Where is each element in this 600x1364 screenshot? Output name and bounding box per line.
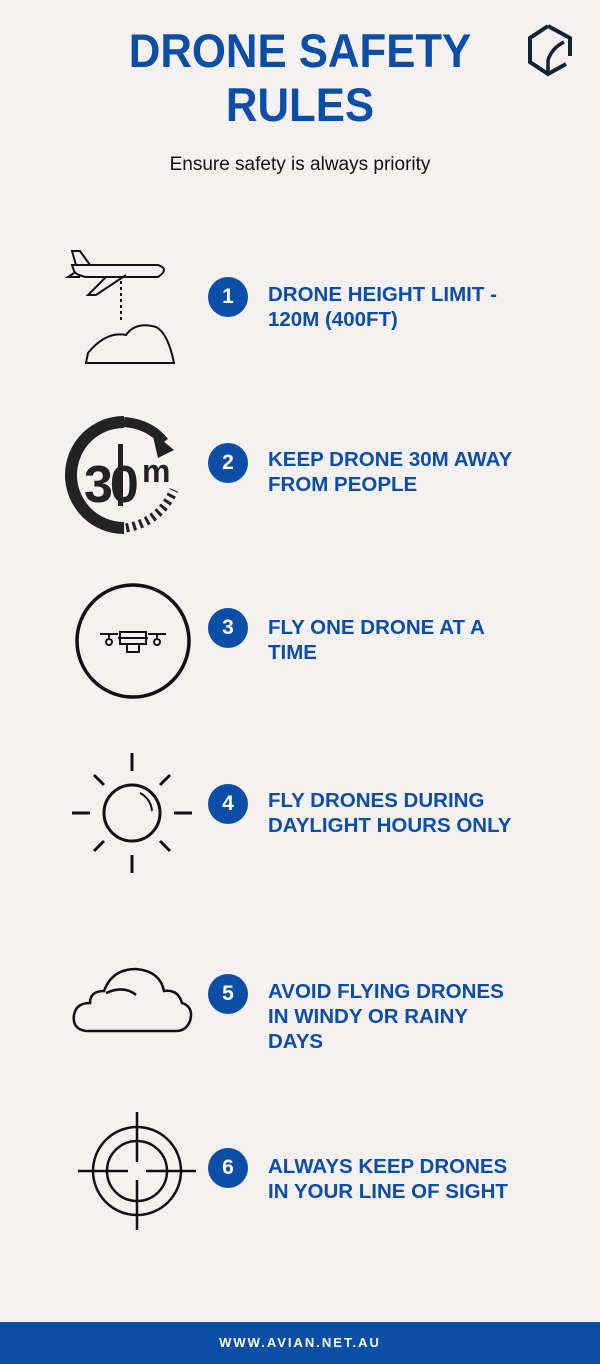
text 3 [268,616,485,664]
rule 3: 3 [222,616,234,639]
icon: crosshair [78,1112,196,1230]
text 1: DRONE HEIGHT LIMIT - [268,283,497,306]
rule 5: 5 [222,982,234,1005]
rule 1 [208,277,248,317]
text 6 [268,1155,508,1203]
title: RULES [226,78,374,131]
icon: logo [528,24,572,76]
text 5 [268,980,504,1053]
footer [0,1322,600,1364]
rule 6 [208,1148,248,1188]
subtitle: Ensure safety is always priority [170,154,430,175]
text 4: FLY DRONES DURING [268,789,484,812]
rule 1: 1 [222,285,234,308]
icon: sun [72,753,192,873]
rule 5 [208,974,248,1014]
title [129,24,471,131]
text 6: IN YOUR LINE OF SIGHT [268,1180,508,1203]
rule 4: 4 [222,792,234,815]
text 4: DAYLIGHT HOURS ONLY [268,814,511,837]
icon: drone in circle [75,583,191,699]
footer: WWW.AVIAN.NET.AU [219,1335,381,1350]
text 1: 120M (400FT) [268,308,398,331]
text 2: KEEP DRONE 30M AWAY [268,448,512,471]
icon: cloud [72,968,192,1032]
icon: plane and mountain [64,250,176,364]
rule 4 [208,784,248,824]
text 4 [268,789,511,837]
rule 6: 6 [222,1156,234,1179]
text 5: IN WINDY OR RAINY [268,1005,468,1028]
rule 3 [208,608,248,648]
icon: 30m [65,416,178,534]
text 3: TIME [268,641,317,664]
title: DRONE SAFETY [129,24,471,77]
text 2: FROM PEOPLE [268,473,417,496]
text 2 [268,448,512,496]
rule 2: 2 [222,451,234,474]
text 5: AVOID FLYING DRONES [268,980,504,1003]
text 3: FLY ONE DRONE AT A [268,616,485,639]
text 6: ALWAYS KEEP DRONES [268,1155,507,1178]
text 5: DAYS [268,1030,323,1053]
icon: 30m: 30 [84,456,137,514]
text 1 [268,283,497,331]
icon: 30m: m [142,453,170,489]
rule 2 [208,443,248,483]
